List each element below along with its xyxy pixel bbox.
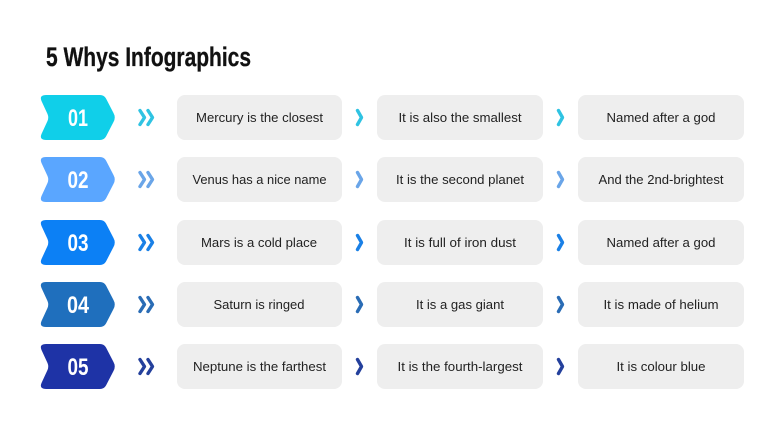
chevron arrow 5a bbox=[358, 360, 362, 374]
badge 03: 03 bbox=[68, 230, 88, 257]
box: Venus has a nice name bbox=[177, 157, 342, 202]
double chevron arrow 2 bbox=[140, 172, 152, 186]
box: It is the second planet bbox=[377, 157, 543, 202]
box: Named after a god bbox=[578, 95, 744, 140]
chevron arrow 2a bbox=[358, 172, 362, 186]
badge 05 bbox=[41, 344, 115, 389]
box: Named after a god: Named after a god bbox=[606, 110, 716, 125]
double chevron arrow 5 bbox=[140, 360, 152, 374]
badge 02: 02 bbox=[68, 167, 88, 194]
double chevron arrow 4 bbox=[140, 298, 152, 312]
row 5 bbox=[41, 344, 744, 389]
badge 01: 01 bbox=[68, 105, 88, 132]
badge 05: 05 bbox=[68, 354, 88, 381]
box: Named after a god bbox=[578, 220, 744, 265]
title: 5 Whys Infographics bbox=[46, 42, 251, 72]
chevron arrow 3b bbox=[558, 236, 562, 250]
row 1 bbox=[41, 95, 744, 140]
double chevron arrow 3 bbox=[140, 236, 152, 250]
box: It is the fourth-largest bbox=[377, 344, 543, 389]
row 2 bbox=[41, 157, 744, 202]
box: It is a gas giant: It is a gas giant bbox=[416, 297, 504, 312]
box: Saturn is ringed bbox=[177, 282, 342, 327]
box: It is the fourth-largest: It is the fourth-largest bbox=[398, 359, 523, 374]
box: It is full of iron dust: It is full of iron dust bbox=[404, 235, 516, 250]
chevron arrow 4b bbox=[558, 298, 562, 312]
chevron arrow 1b bbox=[558, 110, 562, 124]
box: It is full of iron dust bbox=[377, 220, 543, 265]
chevron arrow 1a bbox=[358, 110, 362, 124]
box: Mars is a cold place: Mars is a cold place bbox=[201, 235, 317, 250]
double chevron arrow 1 bbox=[140, 110, 152, 124]
box: It is made of helium bbox=[578, 282, 744, 327]
box: It is the second planet: It is the second planet bbox=[396, 172, 524, 187]
badge 01 bbox=[41, 95, 115, 140]
box: Mercury is the closest bbox=[177, 95, 342, 140]
box: Saturn is ringed: Saturn is ringed bbox=[214, 297, 304, 312]
box: It is also the smallest: It is also the smallest bbox=[398, 110, 522, 125]
box: It is a gas giant bbox=[377, 282, 543, 327]
chevron arrow 5b bbox=[558, 360, 562, 374]
chevron arrow 4a bbox=[358, 298, 362, 312]
box: Neptune is the farthest: Neptune is the farthest bbox=[193, 359, 326, 374]
badge 04 bbox=[41, 282, 115, 327]
box: It is also the smallest bbox=[377, 95, 543, 140]
box: It is colour blue: It is colour blue bbox=[616, 359, 706, 374]
chevron arrow 2b bbox=[558, 172, 562, 186]
badge 02 bbox=[41, 157, 115, 202]
badge 03 bbox=[41, 220, 115, 265]
row 3 bbox=[41, 220, 744, 265]
box: It is colour blue bbox=[578, 344, 744, 389]
box: And the 2nd-brightest bbox=[578, 157, 744, 202]
box: Mercury is the closest: Mercury is the closest bbox=[196, 110, 323, 125]
badge 04: 04 bbox=[67, 292, 90, 319]
box: And the 2nd-brightest: And the 2nd-brightest bbox=[598, 172, 724, 187]
box: It is made of helium: It is made of helium bbox=[604, 297, 718, 312]
row 4 bbox=[41, 282, 744, 327]
box: Neptune is the farthest bbox=[177, 344, 342, 389]
box: Venus has a nice name: Venus has a nice name bbox=[192, 172, 326, 187]
box: Mars is a cold place bbox=[177, 220, 342, 265]
chevron arrow 3a bbox=[358, 236, 362, 250]
box: Named after a god: Named after a god bbox=[606, 235, 716, 250]
